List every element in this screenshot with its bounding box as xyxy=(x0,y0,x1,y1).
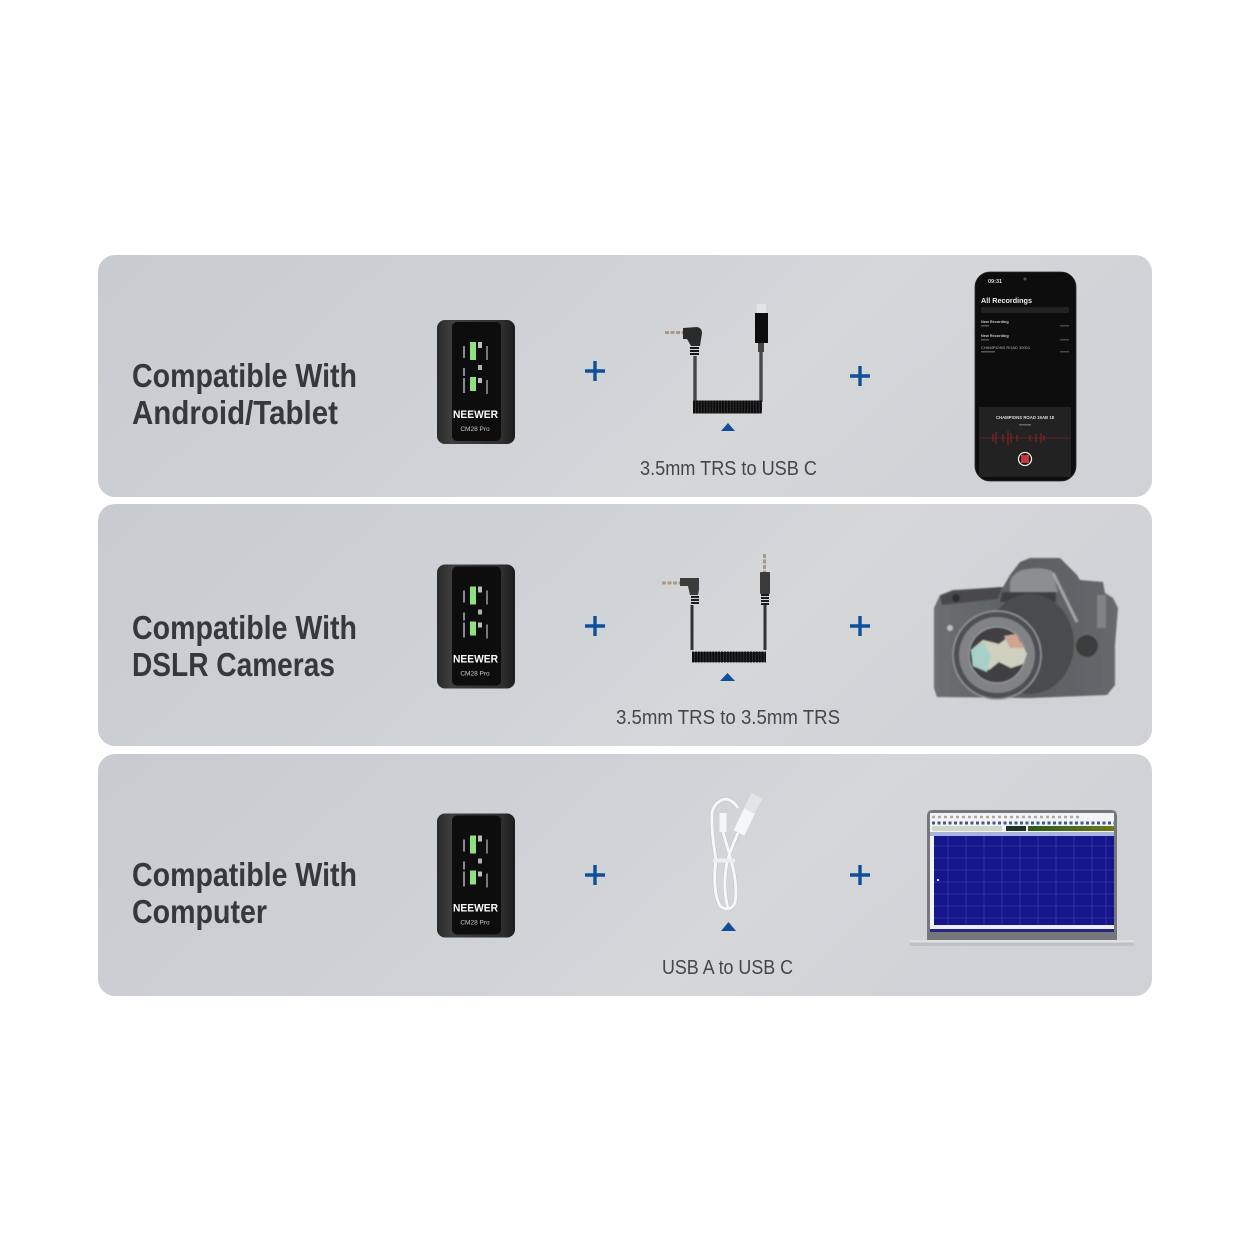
icon: wireless receiver: NEEWER xyxy=(453,902,498,914)
arrow marker xyxy=(720,673,735,681)
label: cable type: USB A to USB C xyxy=(662,957,793,979)
arrow marker xyxy=(721,922,736,931)
plus sign xyxy=(850,366,870,386)
icon: phone with recording app: 09:31 xyxy=(988,279,1002,285)
icon: wireless receiver: NEEWER xyxy=(453,654,498,666)
plus sign xyxy=(585,361,605,381)
icon: phone with recording app: CHAMPIONS ROAD 30001 xyxy=(981,345,1031,350)
plus sign xyxy=(850,865,870,885)
icon: wireless receiver: CM28 Pro xyxy=(460,670,490,678)
label: cable type: 3.5mm TRS to 3.5mm TRS xyxy=(616,707,840,729)
plus sign xyxy=(850,616,870,636)
label: cable type: 3.5mm TRS to USB C xyxy=(640,458,817,480)
icon: wireless receiver: CM28 Pro xyxy=(460,920,490,926)
heading: Computer xyxy=(132,856,357,930)
icon: wireless receiver xyxy=(437,564,515,688)
cable: 3.5mm TRS to 3.5mm TRS xyxy=(662,554,770,662)
plus sign xyxy=(585,616,605,636)
heading: Android/Tablet: Compatible With xyxy=(132,357,357,394)
cable: USB A to USB C xyxy=(712,796,757,909)
heading: DSLR Cameras: Compatible With xyxy=(132,609,357,646)
icon: phone with recording app xyxy=(975,272,1076,481)
icon: phone with recording app: New Recording xyxy=(981,334,1009,338)
icon: wireless receiver xyxy=(437,320,515,444)
heading: Android/Tablet xyxy=(132,357,357,431)
panel: Computer xyxy=(98,754,1152,996)
icon: laptop with audio software xyxy=(910,810,1134,946)
heading: Computer: Computer xyxy=(132,893,267,930)
panel: DSLR Cameras xyxy=(98,504,1152,746)
plus sign xyxy=(585,865,605,885)
heading: DSLR Cameras: DSLR Cameras xyxy=(132,646,335,683)
icon: phone with recording app: CHAMPIONS ROAD 19AB 18 xyxy=(996,415,1055,420)
panel: Android/Tablet xyxy=(98,255,1152,497)
cable: 3.5mm TRS to USB C xyxy=(665,304,768,414)
icon: wireless receiver: NEEWER xyxy=(453,409,498,421)
icon: phone with recording app: All Recordings xyxy=(981,296,1032,305)
heading: Computer: Compatible With xyxy=(132,856,357,893)
icon: wireless receiver xyxy=(437,814,515,938)
icon: wireless receiver: CM28 Pro xyxy=(460,426,490,433)
icon: DSLR camera xyxy=(934,558,1118,699)
heading: Android/Tablet: Android/Tablet xyxy=(132,394,338,431)
arrow marker xyxy=(721,423,735,431)
heading: DSLR Cameras xyxy=(132,609,357,683)
icon: phone with recording app: New Recording xyxy=(981,320,1009,324)
